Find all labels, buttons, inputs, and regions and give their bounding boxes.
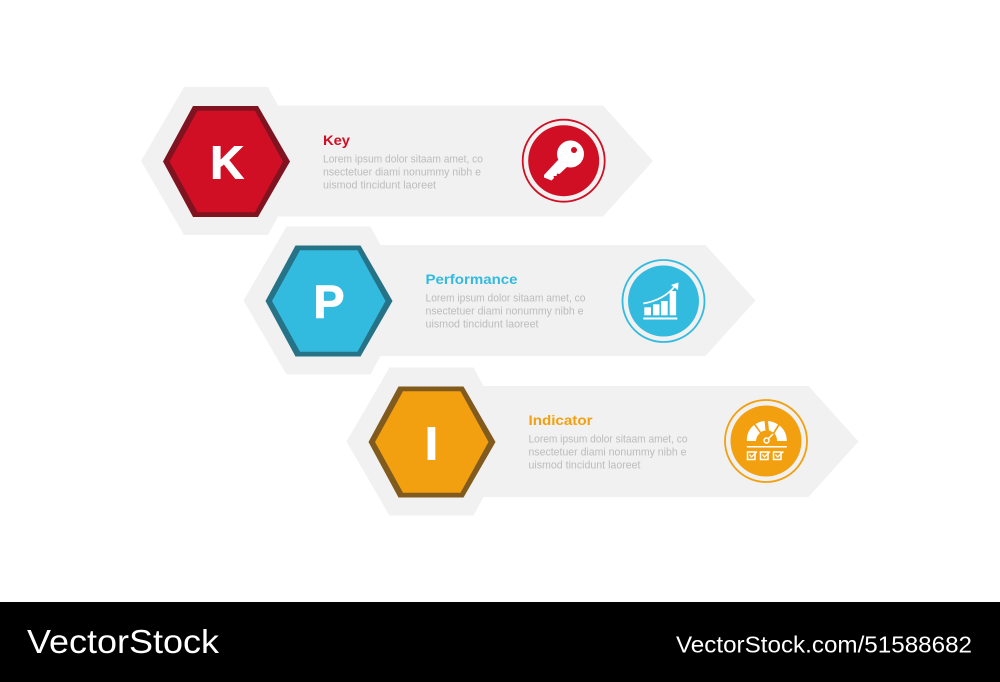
blue hexagon with letter P bbox=[266, 246, 392, 356]
orange hexagon with letter I bbox=[368, 386, 496, 498]
gray arrow band bbox=[141, 87, 653, 235]
footer bar bbox=[0, 602, 1000, 682]
gray arrow band bbox=[346, 368, 858, 516]
body text: Lorem ipsum dolor sitaam amet, co bbox=[323, 154, 483, 166]
body text: nsectetuer diami nonummy nibh e bbox=[426, 306, 584, 318]
panel: I – Indicator bbox=[346, 368, 858, 516]
footer logo text: VectorStock bbox=[27, 624, 219, 661]
body text: uismod tincidunt laoreet bbox=[323, 180, 436, 192]
body text: nsectetuer diami nonummy nibh e bbox=[528, 446, 686, 458]
body text bbox=[323, 154, 483, 192]
red hexagon with letter K: K bbox=[210, 136, 244, 188]
blue hexagon with letter P: P bbox=[313, 276, 345, 328]
footer url text: VectorStock.com/51588682 bbox=[676, 632, 972, 658]
icon: key in red circle bbox=[523, 120, 605, 202]
body text: Lorem ipsum dolor sitaam amet, co bbox=[426, 292, 586, 304]
heading: Performance: Performance bbox=[426, 271, 518, 287]
body text: Lorem ipsum dolor sitaam amet, co bbox=[528, 434, 688, 446]
body text: uismod tincidunt laoreet bbox=[528, 460, 640, 472]
heading: Key: Key bbox=[323, 132, 350, 148]
body text: nsectetuer diami nonummy nibh e bbox=[323, 166, 481, 178]
panel: P – Performance bbox=[244, 226, 756, 374]
red hexagon with letter K bbox=[163, 106, 290, 217]
orange hexagon with letter I: I bbox=[425, 418, 438, 470]
icon: gauge with checkboxes in orange circle bbox=[725, 400, 807, 482]
body text: uismod tincidunt laoreet bbox=[426, 318, 538, 330]
body text bbox=[426, 292, 586, 330]
heading: Indicator: Indicator bbox=[528, 412, 593, 428]
panel: K – Key bbox=[141, 87, 653, 235]
icon: rising bar chart in blue circle bbox=[622, 260, 704, 342]
body text bbox=[528, 434, 688, 472]
gray arrow band bbox=[244, 226, 756, 374]
